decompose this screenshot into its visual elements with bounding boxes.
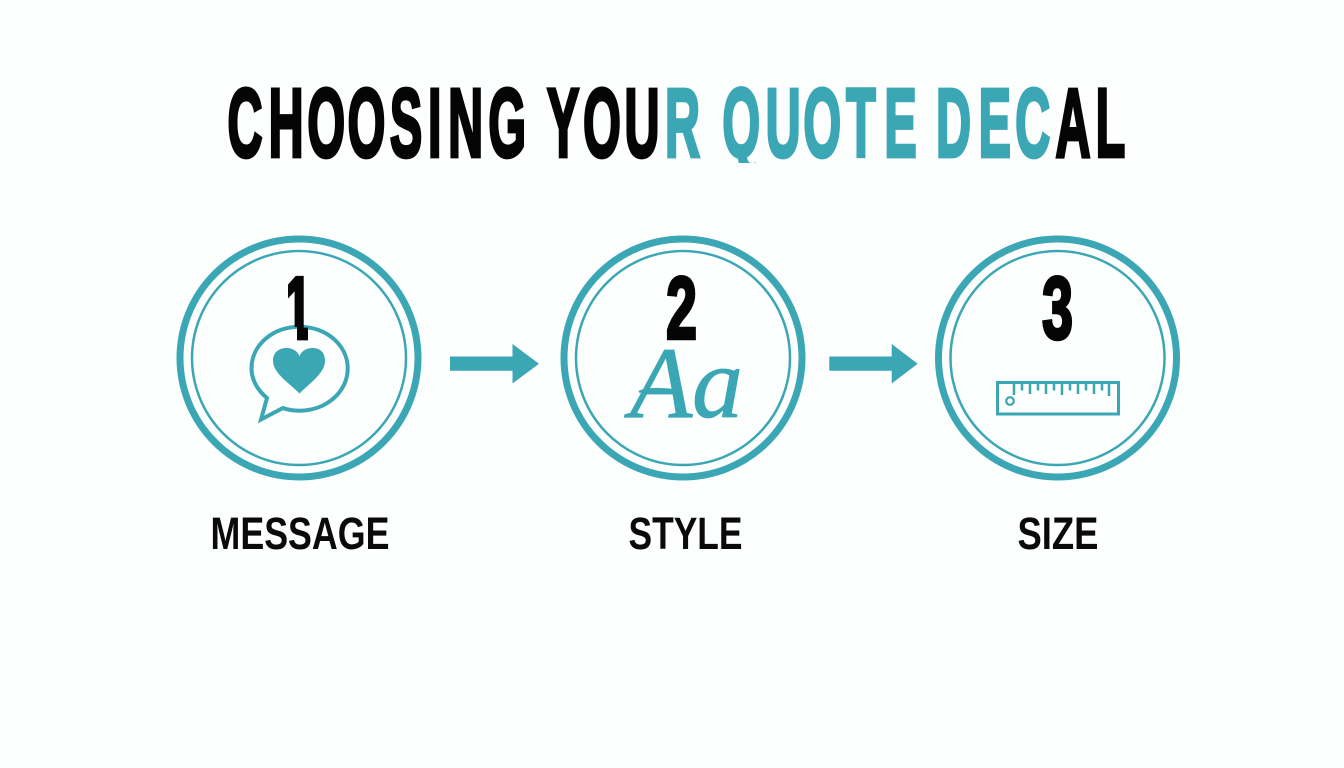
step 2: style [564,239,802,559]
icon: ruler [998,382,1118,414]
step 1 number: 1 [284,260,312,358]
step 1: message [180,239,418,559]
step 2 badge rings [564,239,802,477]
arrow: step 2 to step 3 [829,344,918,384]
step 3 badge rings [938,239,1176,477]
title: CHOOSING YOU [227,70,660,178]
icon: Aa typography: Aa [624,327,743,440]
step 3: size [938,239,1176,559]
step 3 number: 3 [1042,258,1073,358]
step 1 badge rings [180,239,418,477]
title: R QUOTE DEC [665,70,1050,178]
title [228,86,1125,163]
step 2 number: 2 [666,258,697,358]
step 2 label: STYLE [628,508,742,559]
arrow: step 1 to step 2 [450,344,539,384]
icon: speech bubble with heart [252,327,348,420]
step 3 label: SIZE [1018,508,1098,559]
title: AL [1055,70,1125,178]
step 1 label: MESSAGE [210,508,390,559]
